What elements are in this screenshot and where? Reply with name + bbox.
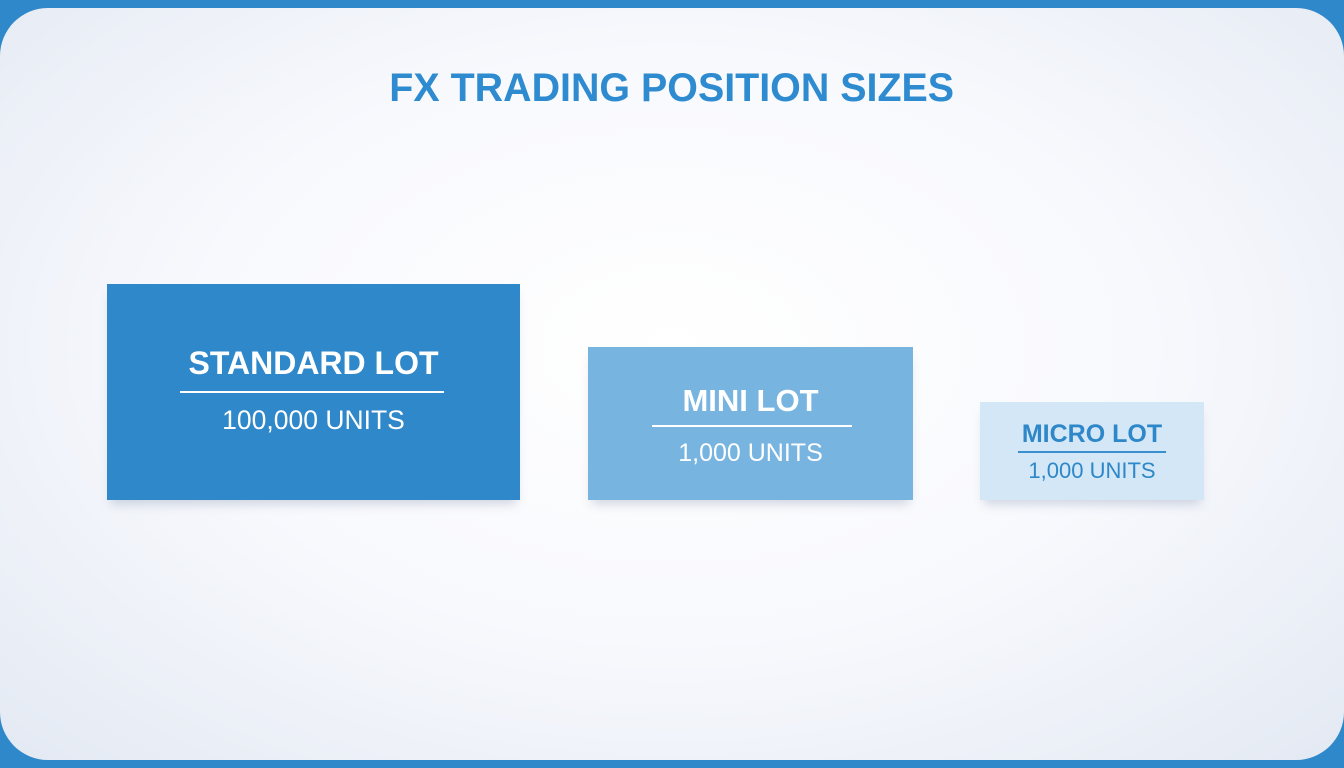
units text: 100,000 UNITS bbox=[222, 405, 405, 435]
heading: micro lot: MICRO LOT bbox=[1022, 420, 1162, 448]
panel: standard lot bbox=[107, 284, 520, 500]
divider line bbox=[180, 391, 444, 393]
divider line bbox=[652, 425, 852, 427]
units text: 1,000 UNITS bbox=[1028, 458, 1156, 483]
title: FX TRADING POSITION SIZES bbox=[390, 66, 954, 110]
panel: mini lot bbox=[588, 347, 913, 500]
panel: micro lot bbox=[980, 402, 1204, 500]
divider line bbox=[1018, 451, 1166, 453]
units text: 1,000 UNITS bbox=[678, 439, 823, 467]
heading: standard lot: STANDARD LOT bbox=[188, 345, 439, 381]
heading: mini lot: MINI LOT bbox=[682, 383, 819, 418]
